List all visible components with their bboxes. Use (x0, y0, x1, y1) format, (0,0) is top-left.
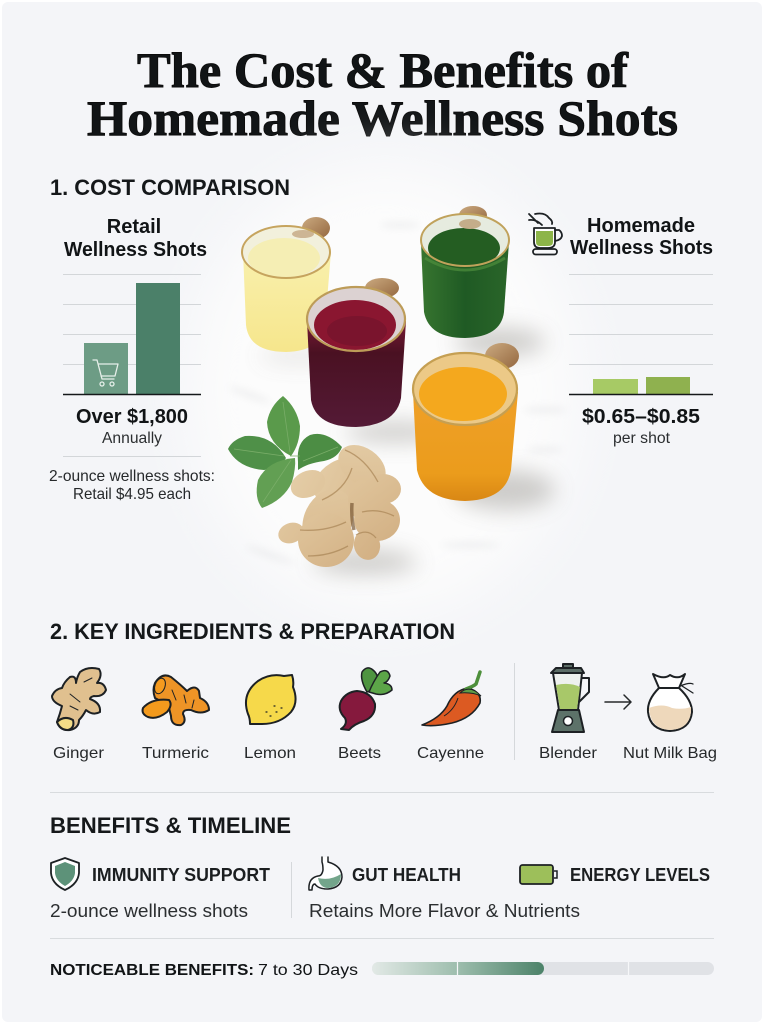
retail note: Retail $4.95 each (73, 486, 191, 503)
glass: yellow lemon shot (242, 217, 331, 352)
benefit note: 2-ounce wellness shots (50, 901, 248, 921)
bar chart: homemade (569, 377, 713, 394)
title: The Cost & Benefits of (137, 42, 629, 98)
benefit note: Retains More Flavor & Nutrients (309, 901, 580, 921)
timeline label (50, 962, 358, 979)
label: Cayenne (417, 745, 484, 762)
benefit: gut health: GUT HEALTH (352, 865, 461, 885)
panel: homemade wellness shots (529, 214, 713, 447)
panel: preparation (539, 664, 717, 762)
progress bar: timeline (372, 962, 714, 975)
icon: stomach (309, 857, 342, 890)
icon: ginger (52, 668, 106, 730)
label: Nut Milk Bag (623, 745, 717, 762)
icon: blender (551, 664, 589, 732)
ginger root (275, 436, 401, 567)
panel: retail wellness shots (49, 216, 215, 503)
icon: beet (340, 668, 392, 730)
homemade unit: per shot (613, 430, 671, 447)
benefit: energy: ENERGY LEVELS (570, 865, 710, 885)
arrow (605, 695, 631, 709)
bar chart: retail (63, 283, 201, 394)
panel: benefits (50, 857, 710, 921)
glass: orange turmeric shot (413, 343, 519, 501)
timeline label: 7 to 30 Days (258, 962, 358, 979)
homemade price: $0.65–$0.85 (582, 406, 700, 428)
icon: turmeric (143, 675, 209, 725)
retail heading (64, 216, 207, 261)
mint sprig (228, 396, 342, 508)
panel: ingredients (52, 668, 484, 762)
glass: beet shot (307, 278, 406, 427)
timeline label: NOTICEABLE BENEFITS: (50, 962, 254, 979)
retail price: Over $1,800 (76, 406, 188, 428)
retail heading: Retail (107, 216, 161, 238)
photo: wellness shots on marble (190, 165, 580, 615)
homemade heading (570, 215, 713, 259)
label: Ginger (53, 745, 105, 762)
heading: key ingredients: 2. KEY INGREDIENTS & PREPARATION (50, 619, 455, 644)
label: Beets (338, 745, 381, 762)
icon: cayenne pepper (422, 672, 481, 726)
icon: green tea cup (529, 214, 562, 254)
retail heading: Wellness Shots (64, 239, 207, 261)
icon: shield (51, 858, 79, 890)
benefit: immunity: IMMUNITY SUPPORT (92, 865, 270, 885)
label: Turmeric (142, 745, 209, 762)
icon: lemon (246, 675, 296, 724)
glass: green shot (421, 206, 509, 338)
icon: nut milk bag (648, 674, 693, 731)
retail note (49, 468, 215, 503)
homemade heading: Wellness Shots (570, 237, 713, 259)
title: Homemade Wellness Shots (87, 90, 678, 146)
label: Blender (539, 745, 598, 762)
heading: benefits and timeline: BENEFITS & TIMELINE (50, 813, 291, 838)
label: Lemon (244, 745, 296, 762)
shadows (258, 328, 555, 574)
icon: battery (520, 865, 557, 884)
heading: cost comparison: 1. COST COMPARISON (50, 175, 290, 200)
homemade heading: Homemade (587, 215, 695, 237)
retail period: Annually (102, 430, 162, 447)
retail note: 2-ounce wellness shots: (49, 468, 215, 485)
title (87, 42, 678, 146)
icon: shopping cart (93, 360, 118, 386)
